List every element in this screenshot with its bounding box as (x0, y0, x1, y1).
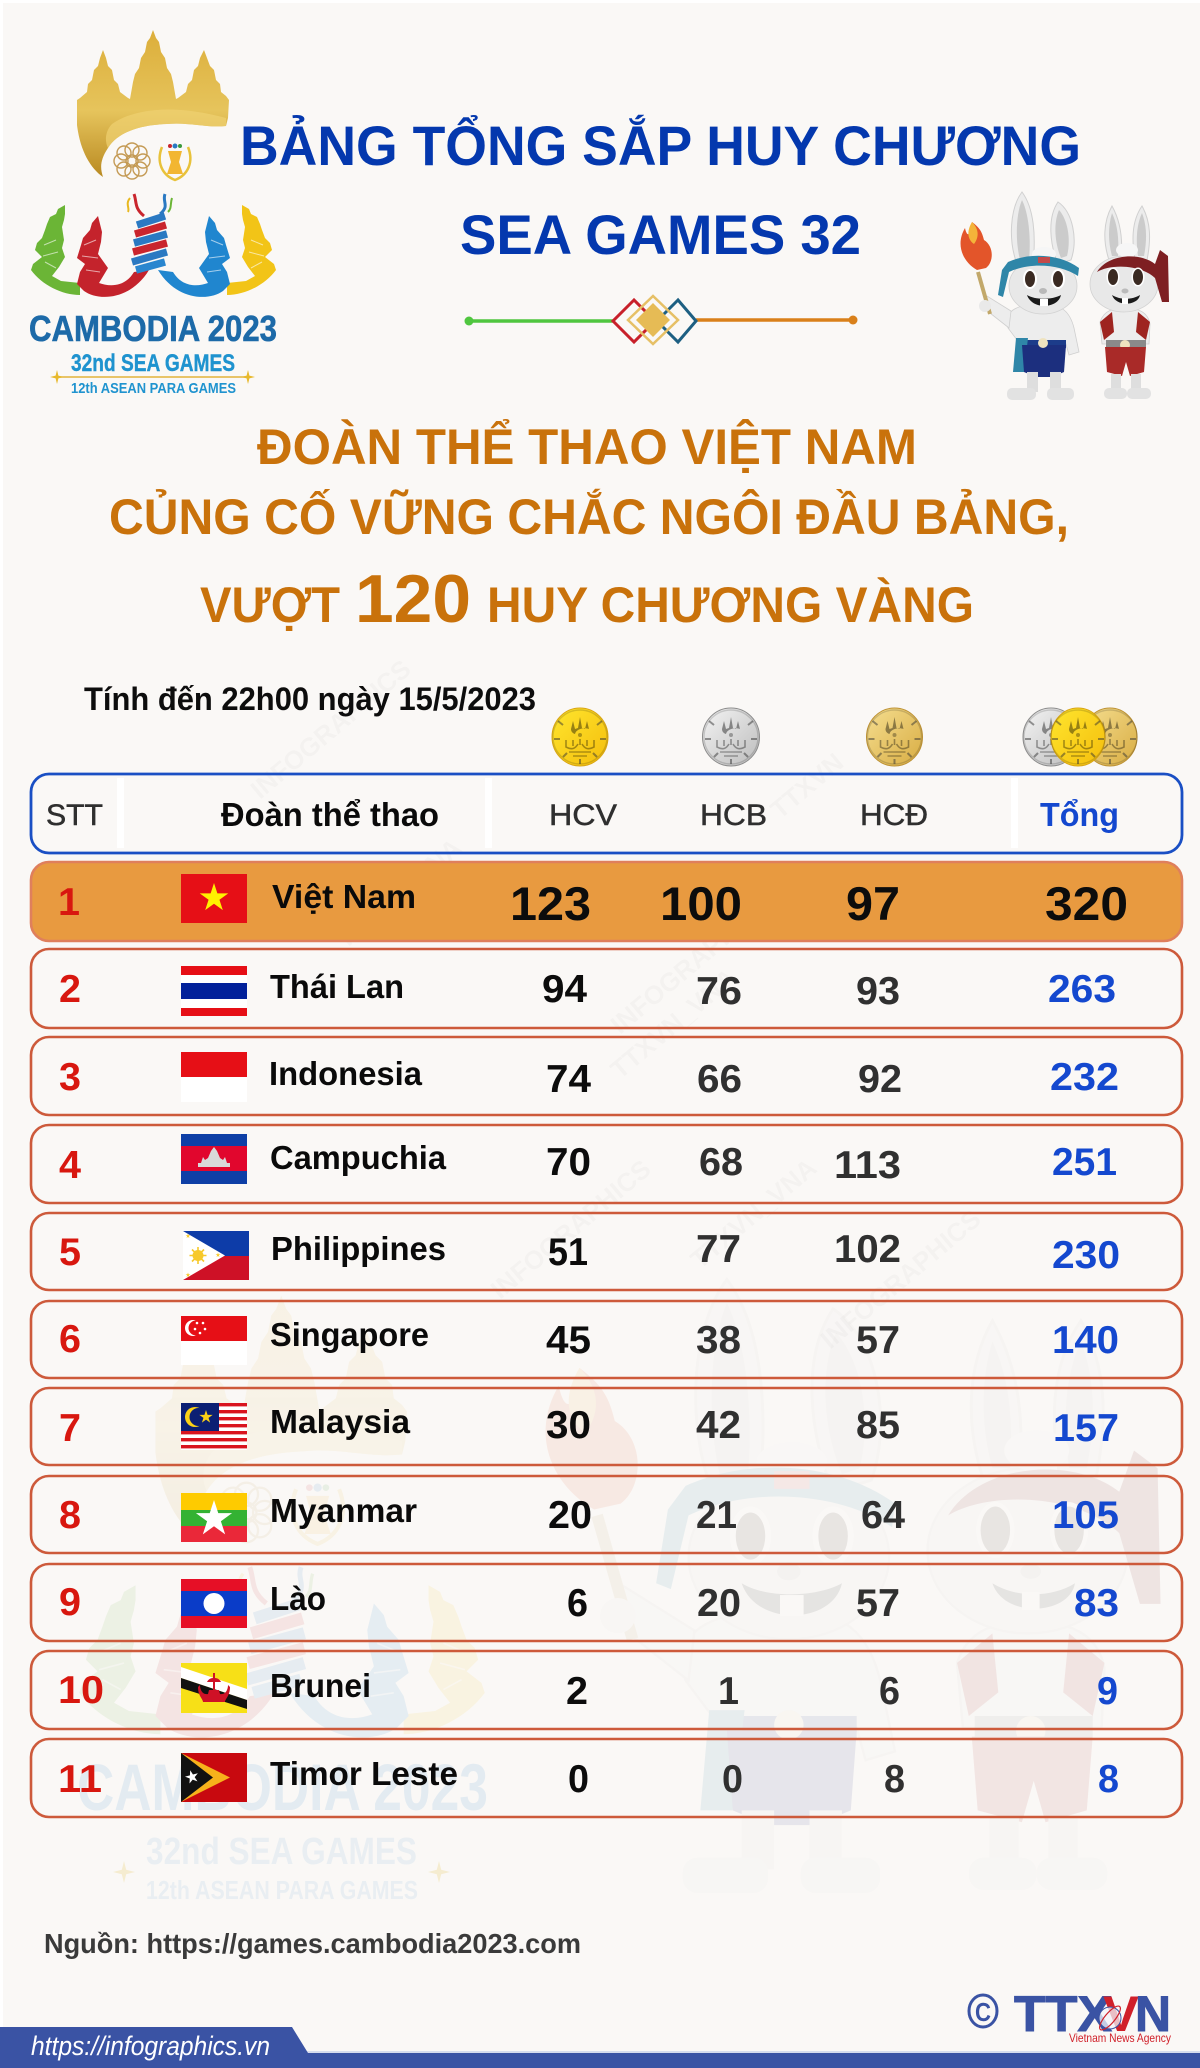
row 11: Timor Leste: 8 (1098, 1758, 1119, 1801)
TTXVN logo: V (1103, 1986, 1140, 2042)
background watermark: faded Cambodia 2023 logo: CAMBODIA 2023 (77, 1750, 488, 1824)
row 11: Timor Leste: 11 (58, 1758, 102, 1801)
row 8: Myanmar: 20 (548, 1494, 592, 1537)
row 2: Thái Lan: 76 (696, 970, 742, 1013)
TTXVN logo (969, 1986, 1171, 2045)
row 9: Lào: 6 (567, 1582, 588, 1625)
row 1: Việt Nam (31, 862, 1182, 941)
flag: Laos (181, 1579, 247, 1628)
row 10: Brunei (31, 1651, 1182, 1729)
row 10: Brunei: 9 (1097, 1670, 1118, 1713)
flag: Thailand (181, 966, 247, 1016)
row 6: Singapore: 38 (696, 1319, 741, 1362)
background watermark: faded Cambodia 2023 logo: 12th ASEAN PARA GAMES (146, 1875, 418, 1905)
row 9: Lào: 57 (856, 1582, 900, 1625)
row 5: Philippines: 102 (834, 1228, 901, 1271)
flag: Vietnam (181, 874, 247, 923)
footer url: https://infographics.vn (31, 2031, 270, 2061)
row 7: Malaysia: Malaysia (270, 1403, 411, 1440)
title: BẢNG TỔNG SẮP HUY CHƯƠNG (240, 114, 1081, 177)
row 8: Myanmar: Myanmar (270, 1492, 417, 1529)
row 5: Philippines: 77 (696, 1228, 741, 1271)
row 7: Malaysia: 157 (1053, 1407, 1119, 1450)
row 11: Timor Leste: 0 (568, 1758, 589, 1801)
background watermark: faded Cambodia 2023 logo (77, 1296, 488, 1905)
background watermark: diagonal agency marks: INFOGRAPHICS (815, 1203, 987, 1355)
row 7: Malaysia: 85 (856, 1404, 900, 1447)
background watermark: faded Cambodia 2023 logo: 32nd SEA GAMES (146, 1831, 417, 1873)
row 11: Timor Leste: 8 (884, 1758, 905, 1801)
row 7: Malaysia (31, 1388, 1182, 1465)
table header (31, 774, 1182, 853)
row 4: Campuchia: 113 (834, 1144, 901, 1187)
logo: Cambodia 2023 SEA Games (29, 30, 277, 397)
header: delegation: Đoàn thể thao (221, 796, 439, 833)
row 5: Philippines: 230 (1052, 1234, 1120, 1277)
row 2: Thái Lan (31, 949, 1182, 1028)
subtitle heading: HUY CHƯƠNG VÀNG (487, 577, 974, 633)
row 2: Thái Lan: 94 (542, 968, 587, 1011)
row 4: Campuchia (31, 1125, 1182, 1203)
icon: gold medal (552, 708, 608, 766)
row 2: Thái Lan: 2 (59, 968, 81, 1011)
row 6: Singapore: 140 (1052, 1319, 1119, 1362)
subtitle heading: VƯỢT (200, 577, 340, 633)
row 11: Timor Leste: Timor Leste (270, 1755, 458, 1792)
icon: bronze medal (866, 708, 922, 766)
row 3: Indonesia: 232 (1050, 1056, 1119, 1099)
row 6: Singapore (31, 1301, 1182, 1378)
background watermark: faded mascots (546, 1279, 1161, 1893)
header: bronze: HCĐ (860, 799, 928, 832)
footer band (0, 2027, 1200, 2068)
flag: Myanmar (181, 1493, 247, 1542)
flag: Timor-Leste (181, 1753, 247, 1802)
row 5: Philippines: Philippines (271, 1230, 446, 1267)
subtitle heading (109, 419, 1069, 637)
row 1: Việt Nam: 320 (1045, 877, 1128, 930)
row 9: Lào (31, 1564, 1182, 1641)
row 9: Lào: Lào (270, 1580, 326, 1617)
subtitle heading: 120 (355, 561, 471, 637)
background watermark: diagonal agency marks (245, 653, 987, 1355)
background watermark: diagonal agency marks: TTXVN_VNA (605, 962, 742, 1085)
header: rank: STT (46, 799, 103, 832)
row 3: Indonesia: Indonesia (269, 1055, 423, 1092)
mascots: two rabbits (961, 192, 1169, 400)
icon: three medals for total (1023, 708, 1137, 766)
header: total: Tổng (1040, 796, 1119, 833)
background watermark: diagonal agency marks: INFOGRAPHICS (245, 653, 417, 805)
row 8: Myanmar: 105 (1052, 1494, 1119, 1537)
row 4: Campuchia: 70 (546, 1141, 591, 1184)
source note: Nguồn: https://games.cambodia2023.com (44, 1928, 581, 1959)
row 10: Brunei: 6 (879, 1670, 900, 1713)
row 6: Singapore: 45 (546, 1319, 591, 1362)
row 9: Lào: 20 (697, 1582, 741, 1625)
flag: Philippines (183, 1231, 249, 1280)
title: SEA GAMES 32 (460, 203, 861, 266)
row 3: Indonesia: 74 (546, 1058, 591, 1101)
row 5: Philippines: 5 (59, 1231, 81, 1274)
agency caption: Vietnam News Agency (1069, 2031, 1171, 2045)
flag: Indonesia (181, 1052, 247, 1102)
subtitle heading: CỦNG CỐ VỮNG CHẮC NGÔI ĐẦU BẢNG, (109, 488, 1069, 545)
row 2: Thái Lan: Thái Lan (270, 968, 404, 1005)
row 2: Thái Lan: 263 (1048, 968, 1116, 1011)
row 7: Malaysia: 7 (59, 1407, 81, 1450)
date note: Tính đến 22h00 ngày 15/5/2023 (84, 681, 536, 717)
row 3: Indonesia: 92 (858, 1058, 902, 1101)
background watermark: diagonal agency marks: TTXVN (765, 747, 849, 825)
flag: Cambodia (181, 1134, 247, 1184)
row 8: Myanmar: 8 (59, 1494, 81, 1537)
agency wordmark: TTX (1014, 1986, 1112, 2042)
subtitle heading: ĐOÀN THỂ THAO VIỆT NAM (257, 419, 917, 475)
row 4: Campuchia: Campuchia (270, 1139, 447, 1176)
row 11: Timor Leste (31, 1739, 1182, 1817)
flag: Brunei (181, 1663, 247, 1713)
row 8: Myanmar: 64 (861, 1494, 905, 1537)
row 5: Philippines: 51 (548, 1231, 588, 1274)
row 1: Việt Nam: 1 (58, 881, 80, 924)
row 1: Việt Nam: 97 (846, 877, 900, 930)
header: gold: HCV (549, 799, 617, 832)
background watermark: diagonal agency marks: INFOGRAPHICS (605, 888, 777, 1040)
row 8: Myanmar: 21 (696, 1494, 737, 1537)
row 10: Brunei: Brunei (270, 1667, 371, 1704)
row 4: Campuchia: 68 (699, 1141, 743, 1184)
flag: Singapore (181, 1316, 247, 1365)
title divider ornament (464, 296, 858, 344)
row 6: Singapore: 57 (856, 1319, 900, 1362)
row 3: Indonesia: 3 (59, 1056, 81, 1099)
logo wordmark: CAMBODIA 2023 (29, 308, 277, 349)
row 3: Indonesia (31, 1037, 1182, 1115)
header: silver: HCB (700, 799, 767, 832)
row 2: Thái Lan: 93 (856, 970, 900, 1013)
background watermark: diagonal agency marks: TTXVN_VNA (330, 832, 467, 955)
row 11: Timor Leste: 0 (722, 1758, 743, 1801)
row 8: Myanmar (31, 1476, 1182, 1553)
row 10: Brunei: 2 (566, 1670, 588, 1713)
row 9: Lào: 9 (59, 1581, 81, 1624)
row 4: Campuchia: 251 (1052, 1141, 1117, 1184)
icon: silver medal (702, 708, 760, 766)
title (240, 114, 1081, 266)
row 10: Brunei: 10 (58, 1669, 104, 1712)
copyright mark (969, 1995, 997, 2027)
row 5: Philippines (31, 1213, 1182, 1290)
TTXVN logo: N (1135, 1986, 1171, 2042)
flag: Malaysia (181, 1403, 247, 1450)
row 7: Malaysia: 42 (696, 1404, 741, 1447)
row 1: Việt Nam: Việt Nam (272, 878, 416, 915)
row 3: Indonesia: 66 (697, 1058, 742, 1101)
row 6: Singapore: Singapore (270, 1316, 429, 1353)
row 10: Brunei: 1 (718, 1670, 739, 1713)
row 6: Singapore: 6 (59, 1318, 81, 1361)
background watermark: diagonal agency marks: INFOGRAPHICS (485, 1153, 657, 1305)
background watermark: diagonal agency marks: TTXVN_VNA (685, 1152, 822, 1275)
row 1: Việt Nam: 100 (660, 877, 742, 930)
copyright mark: C (975, 1997, 991, 2027)
logo subtitle: 32nd SEA GAMES (71, 350, 235, 377)
logo para games line: 12th ASEAN PARA GAMES (71, 380, 236, 397)
row 4: Campuchia: 4 (59, 1144, 81, 1187)
row 9: Lào: 83 (1074, 1582, 1119, 1625)
row 1: Việt Nam: 123 (510, 877, 591, 930)
row 7: Malaysia: 30 (546, 1404, 591, 1447)
